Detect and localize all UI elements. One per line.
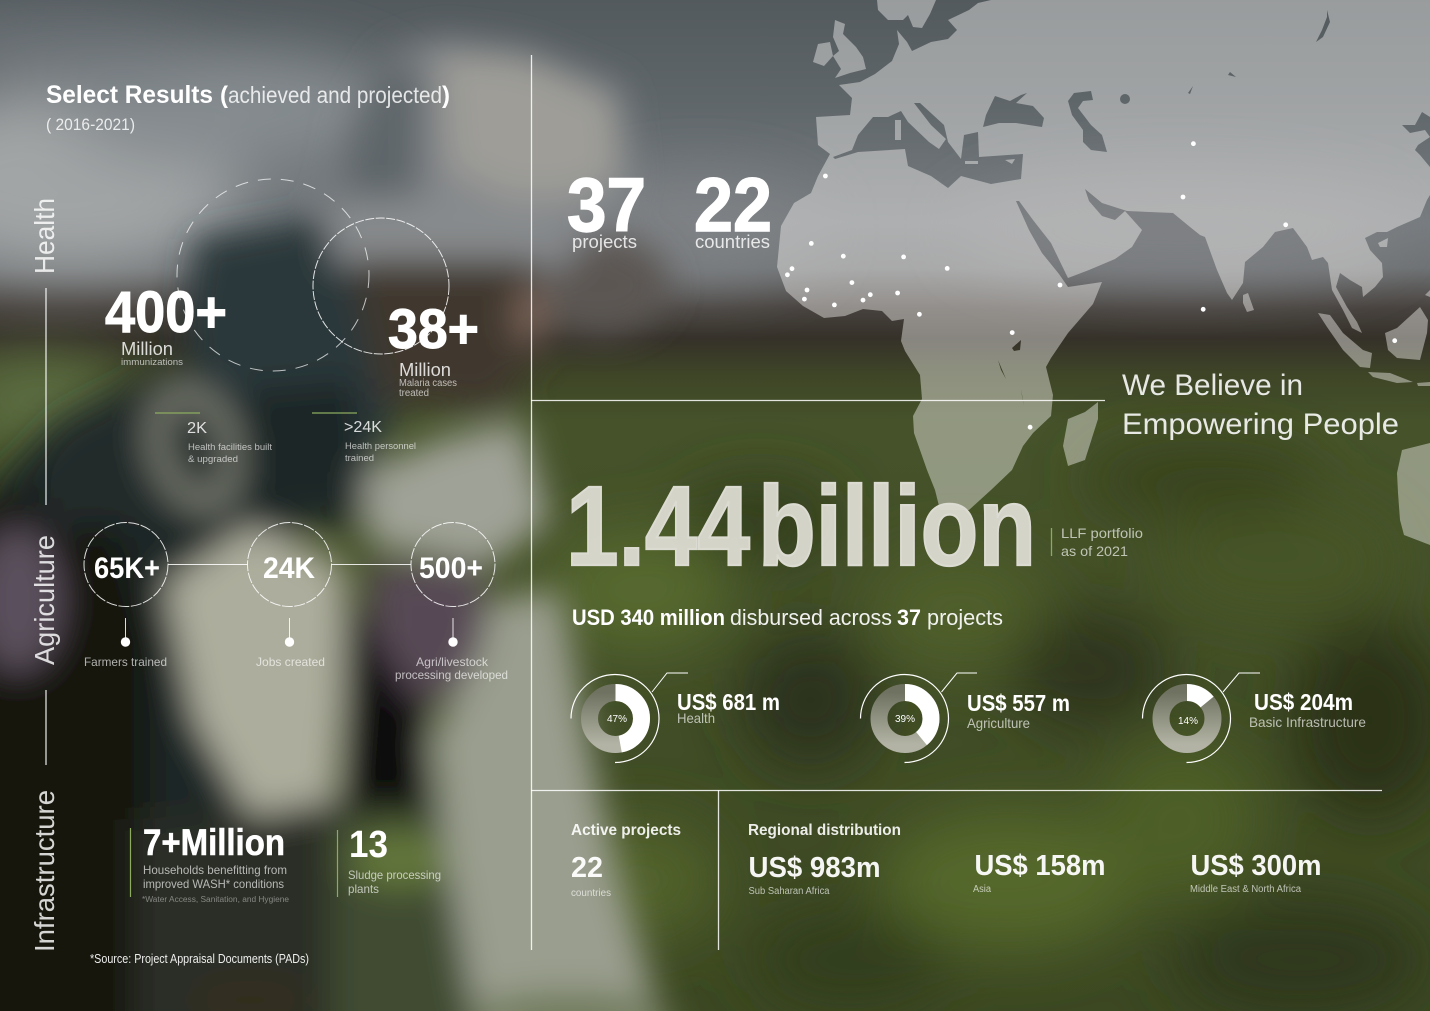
tagline: Empowering People: [1122, 408, 1399, 441]
right jacket strip: [430, 590, 670, 1011]
donut: agriculture 39%: 39%: [895, 714, 915, 725]
amount: agriculture: US$ 557 m: [967, 690, 1070, 716]
title: Select Results: (: [220, 82, 228, 109]
stat: 37 projects: projects: [572, 232, 637, 252]
agriculture: connected circles with values: Farmers trained: [84, 655, 167, 669]
agriculture: connected circles with values: 65K+: [94, 552, 160, 585]
region: middle east and north africa: [1190, 850, 1322, 895]
health stat: 38+ million malaria cases: [388, 297, 479, 399]
donut: health 47%: [571, 673, 688, 762]
section label: Health: Health: [29, 198, 60, 274]
disbursement sentence: 37: [897, 605, 921, 630]
left dark body: [0, 360, 300, 1011]
tagline: We Believe in: [1122, 369, 1303, 402]
health stat: 38+ million malaria cases: Million: [399, 360, 451, 380]
health stat: over 24K personnel: Health personnel: [345, 441, 416, 452]
health stat: over 24K personnel: >24K: [344, 419, 382, 436]
headline figure: 1.44 billion: 1.44: [566, 463, 750, 589]
donut: agriculture 39%: [860, 673, 977, 762]
agriculture: connected circles with values: 500+: [419, 552, 483, 585]
infrastructure stat: 7+ million households: improved WASH* conditions: [143, 877, 284, 891]
health stat: 400+ million immunizations: Million: [121, 339, 173, 359]
region: asia: [973, 850, 1106, 895]
active projects: [571, 822, 681, 899]
portfolio note: as of 2021: [1061, 543, 1128, 559]
disbursement sentence: disbursed across: [730, 605, 892, 630]
active projects: countries: [571, 888, 611, 899]
region: sub-saharan africa: Sub Saharan Africa: [748, 886, 830, 897]
dark strip: [345, 590, 430, 810]
health: overlapping dashed circles: [177, 179, 449, 371]
regional distribution heading: Regional distribution: [748, 822, 901, 839]
collar loop: [143, 384, 247, 512]
headline figure: 1.44 billion: [566, 463, 1036, 589]
agriculture: connected circles with values: Agri/livestock: [416, 655, 489, 669]
active projects: 22: [571, 852, 603, 884]
portfolio note: LLF portfolio: [1061, 525, 1143, 541]
shoulder: [360, 420, 550, 565]
region: middle east and north africa: US$ 300m: [1190, 850, 1322, 882]
health stat: 2K facilities: [155, 413, 272, 465]
agriculture: connected circles with values: Jobs created: [256, 655, 325, 669]
title: Select Results: Select Results: [46, 81, 213, 109]
amount: basic infrastructure: US$ 204m: [1254, 689, 1353, 715]
disbursement sentence: projects: [927, 605, 1003, 630]
section label: Infrastructure: Infrastructure: [29, 790, 60, 952]
agriculture: connected circles with values: [84, 522, 508, 682]
agriculture: connected circles with values: 24K: [263, 552, 315, 585]
amount: health: Health: [677, 710, 715, 726]
tagline: [1122, 369, 1399, 441]
agriculture: connected circles with values: processing developed: [395, 668, 508, 682]
infrastructure stat: 13 sludge plants: Sludge processing: [348, 868, 441, 882]
donut: health 47%: 47%: [607, 714, 627, 725]
disbursement sentence: USD 340 million: [572, 605, 725, 630]
amount: agriculture: Agriculture: [967, 715, 1030, 731]
region: asia: US$ 158m: [974, 850, 1106, 882]
health stat: 2K facilities: & upgraded: [188, 454, 238, 465]
region: sub-saharan africa: US$ 983m: [748, 852, 880, 884]
health stat: 400+ million immunizations: 400+: [105, 280, 227, 345]
infrastructure stat: 13 sludge plants: plants: [348, 882, 379, 896]
face: [350, 260, 545, 410]
region: asia: Asia: [973, 884, 991, 895]
portfolio note: [1052, 525, 1143, 559]
amount: basic infrastructure: Basic Infrastructure: [1249, 714, 1366, 730]
map location dots: [785, 141, 1397, 430]
title: Select Results: [46, 81, 450, 134]
health stat: 38+ million malaria cases: 38+: [388, 297, 479, 360]
region: middle east and north africa: Middle East & North Africa: [1190, 884, 1301, 895]
section label: Agriculture: Agriculture: [29, 535, 60, 665]
world map: [777, 0, 1430, 545]
health stat: over 24K personnel: trained: [345, 453, 374, 464]
title: Select Results: ): [442, 82, 450, 109]
health stat: 38+ million malaria cases: Malaria cases: [399, 378, 457, 389]
title: Select Results: achieved and projected: [228, 82, 442, 108]
headline figure: 1.44 billion: billion: [758, 463, 1036, 589]
donut: basic infrastructure 14%: 14%: [1178, 716, 1198, 727]
disbursement sentence: [572, 605, 1003, 630]
tree behind the head: [530, 235, 670, 335]
active projects: Active projects: [571, 822, 681, 839]
amount: health: US$ 681 m: [677, 689, 780, 715]
hood: [185, 215, 400, 510]
bottom centre: [134, 800, 340, 1011]
beanie: [325, 40, 630, 270]
title: Select Results: ( 2016-2021): [46, 115, 135, 134]
infrastructure stat: 7+ million households: [130, 822, 290, 904]
central light jacket: [165, 525, 345, 815]
infrastructure stat: 13 sludge plants: 13: [349, 824, 388, 866]
stat: 37 projects: 37: [567, 163, 646, 248]
health stat: 2K facilities: 2K: [187, 420, 207, 437]
amount: health: [677, 689, 780, 726]
health stat: 2K facilities: Health facilities built: [188, 442, 272, 453]
health stat: 400+ million immunizations: immunizations: [121, 357, 183, 368]
infrastructure stat: 7+ million households: *Water Access, Sanitation, and Hygiene: [142, 895, 290, 904]
health stat: 38+ million malaria cases: treated: [399, 388, 429, 399]
stat: 22 countries: 22: [694, 163, 772, 248]
health stat: over 24K personnel: [312, 413, 416, 464]
donut: basic infrastructure 14%: [1142, 673, 1260, 762]
infrastructure stat: 13 sludge plants: [338, 824, 441, 897]
region: sub-saharan africa: [748, 852, 880, 897]
amount: agriculture: [967, 690, 1070, 731]
infrastructure stat: 7+ million households: Households benefitting from: [143, 863, 287, 877]
purple sleeve: [368, 565, 490, 700]
amount: basic infrastructure: [1249, 689, 1366, 730]
infrastructure stat: 7+ million households: 7+Million: [143, 822, 285, 863]
stat: 22 countries: countries: [695, 232, 770, 252]
source note: *Source: Project Appraisal Documents (PADs): [90, 952, 309, 966]
